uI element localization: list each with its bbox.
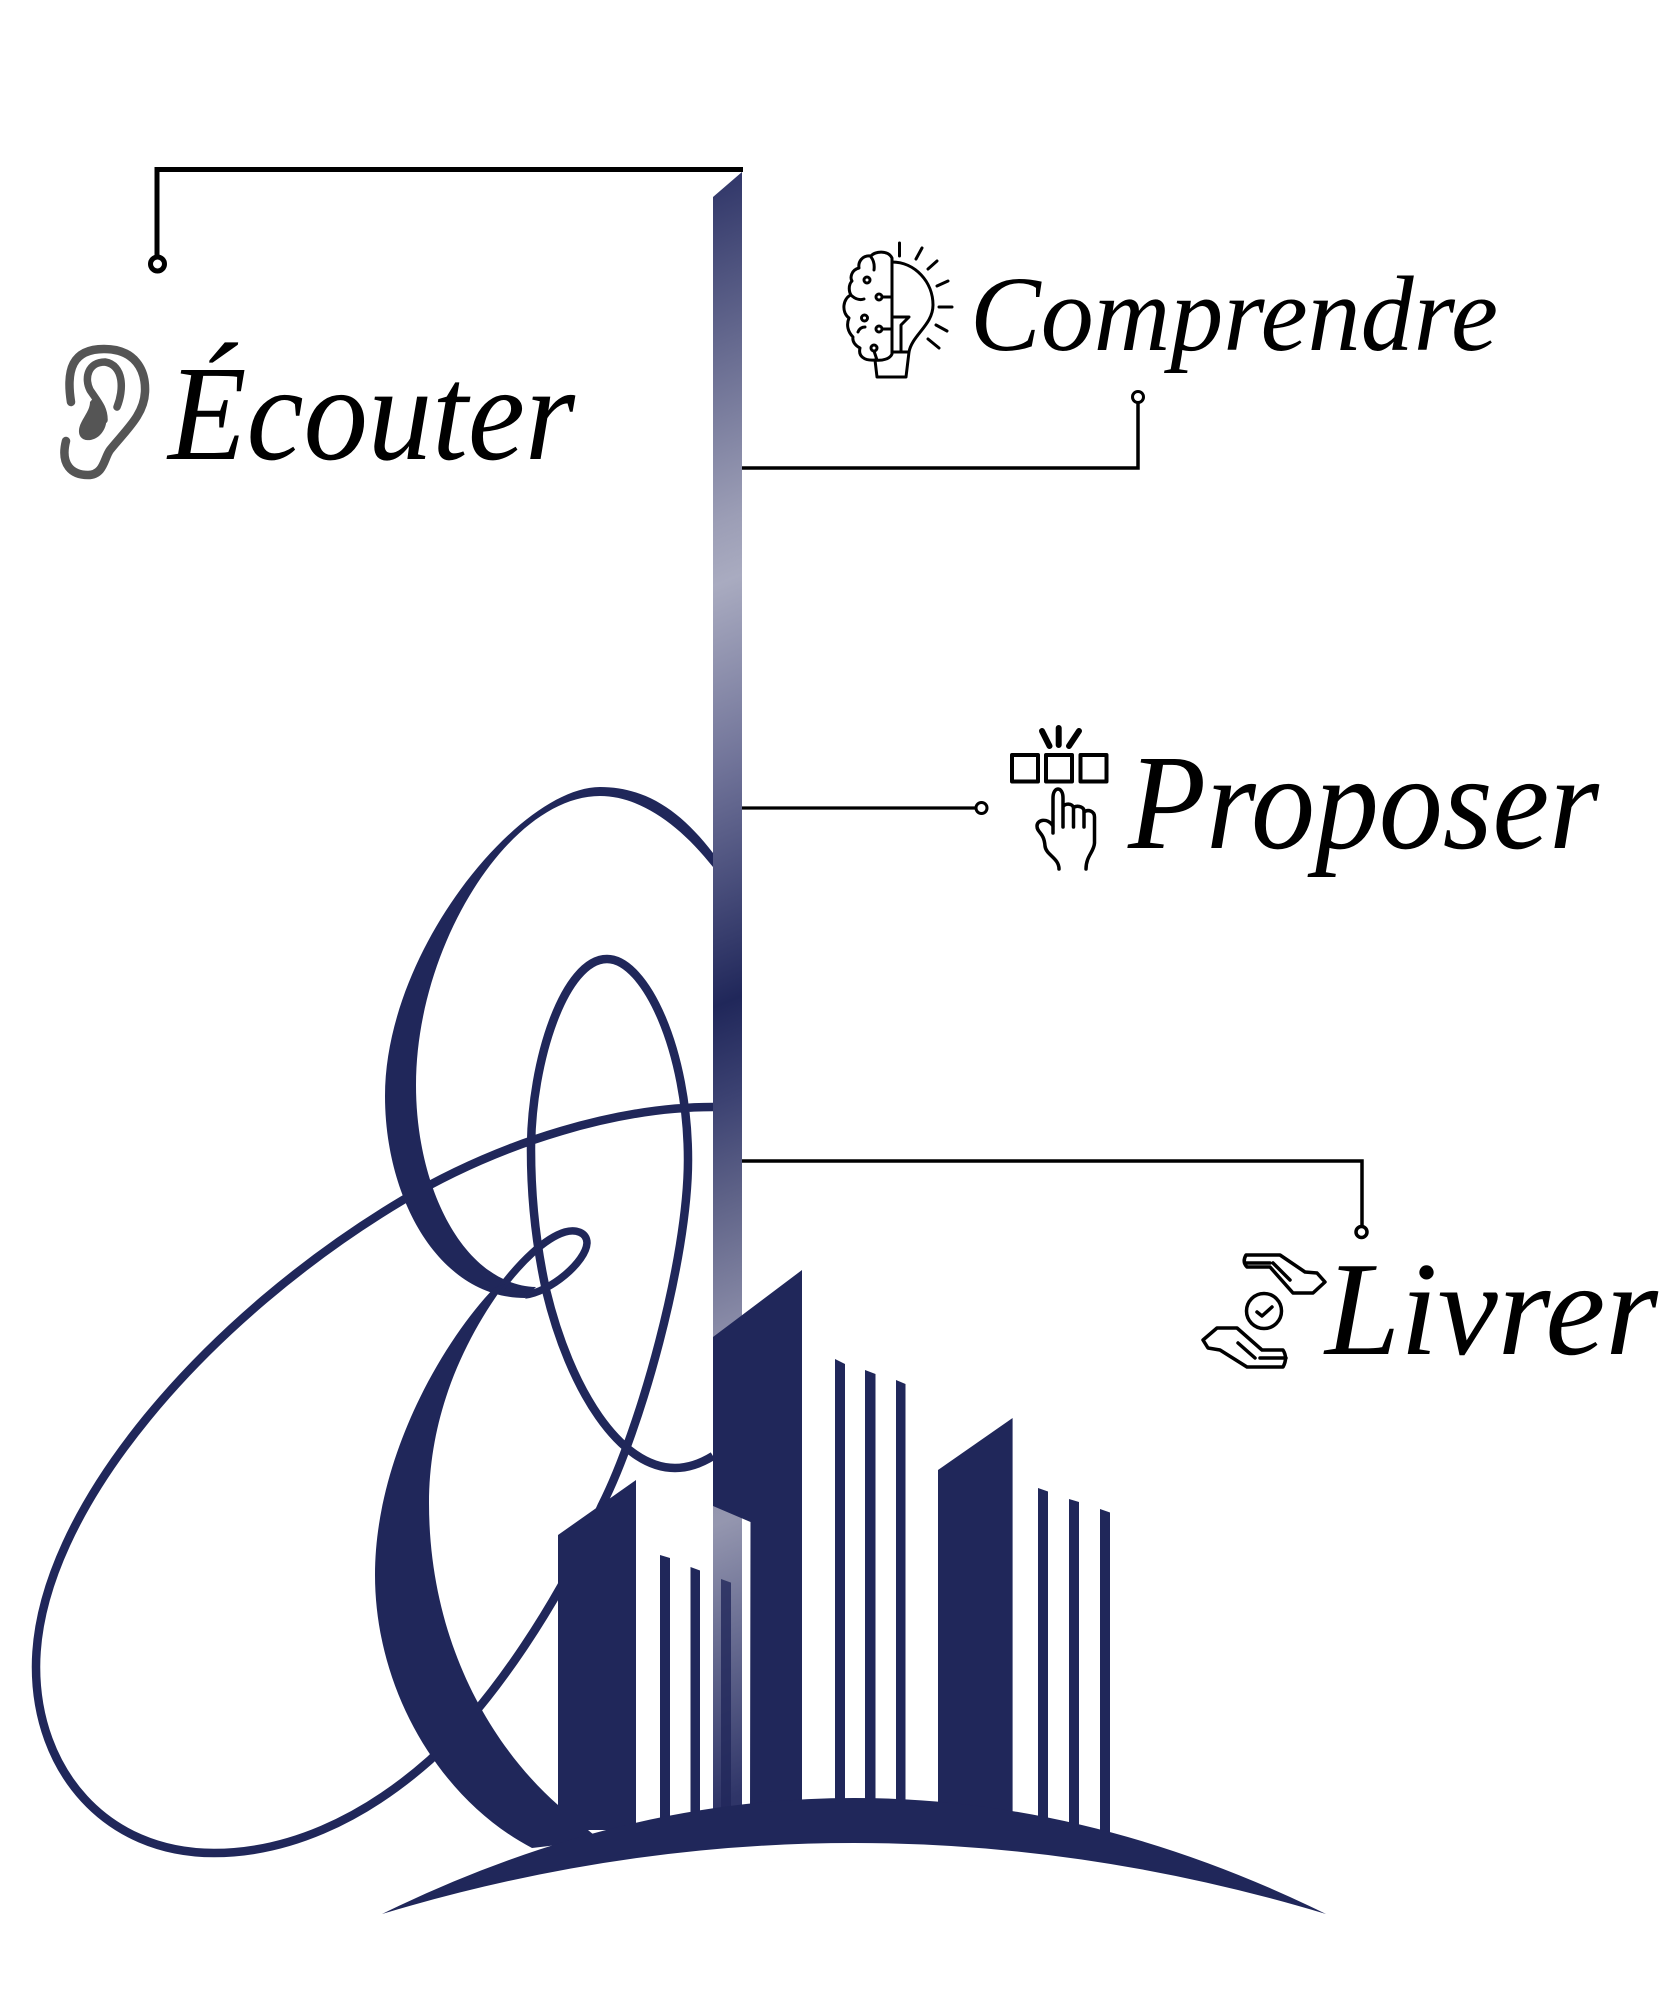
- building strip 1 right of left tower: [660, 1555, 670, 1825]
- building strip 2 right of main tower: [865, 1370, 876, 1810]
- icon: pointing hand on three boxes: [1012, 728, 1106, 869]
- building strip 3 right of second tower: [1100, 1509, 1110, 1840]
- connector: Écouter: [150, 170, 743, 271]
- icon: ear: [64, 349, 145, 475]
- city skyline: [382, 1270, 1326, 1914]
- connector: Livrer: [742, 1161, 1367, 1238]
- connector: Comprendre: [742, 392, 1144, 468]
- swirl: thick upper loop: [385, 787, 713, 1298]
- heading: Livrer: Livrer: [1323, 1235, 1659, 1383]
- icon: brain lightbulb: [844, 243, 952, 377]
- heading: Écouter: Écouter: [166, 339, 576, 489]
- icon: hands with check mark: [1203, 1255, 1325, 1367]
- building strip 1 right of main tower: [835, 1359, 845, 1810]
- swirl: tall loop and large lower-left loop: [36, 959, 713, 1853]
- building: second tower: [938, 1418, 1013, 1820]
- building strip 1 right of second tower: [1038, 1488, 1048, 1830]
- heading: Proposer: Proposer: [1127, 728, 1600, 878]
- building strip 2 right of left tower: [690, 1567, 700, 1825]
- building strip 3 right of main tower: [896, 1380, 906, 1810]
- building: main tower: [713, 1270, 802, 1815]
- calligraphic swirl ampersand: [36, 787, 713, 1853]
- building strip 2 right of second tower: [1069, 1499, 1079, 1835]
- vertical gradient bar: [713, 172, 742, 1830]
- swirl: thick lower curve: [375, 1284, 600, 1848]
- building: left tower: [558, 1480, 636, 1830]
- swirl: small centre loop: [498, 1231, 587, 1295]
- building strip 3 over the bar: [721, 1579, 731, 1825]
- heading: Comprendre: Comprendre: [970, 256, 1498, 374]
- curved ground crescent: [382, 1798, 1326, 1914]
- connector: Proposer: [742, 802, 987, 814]
